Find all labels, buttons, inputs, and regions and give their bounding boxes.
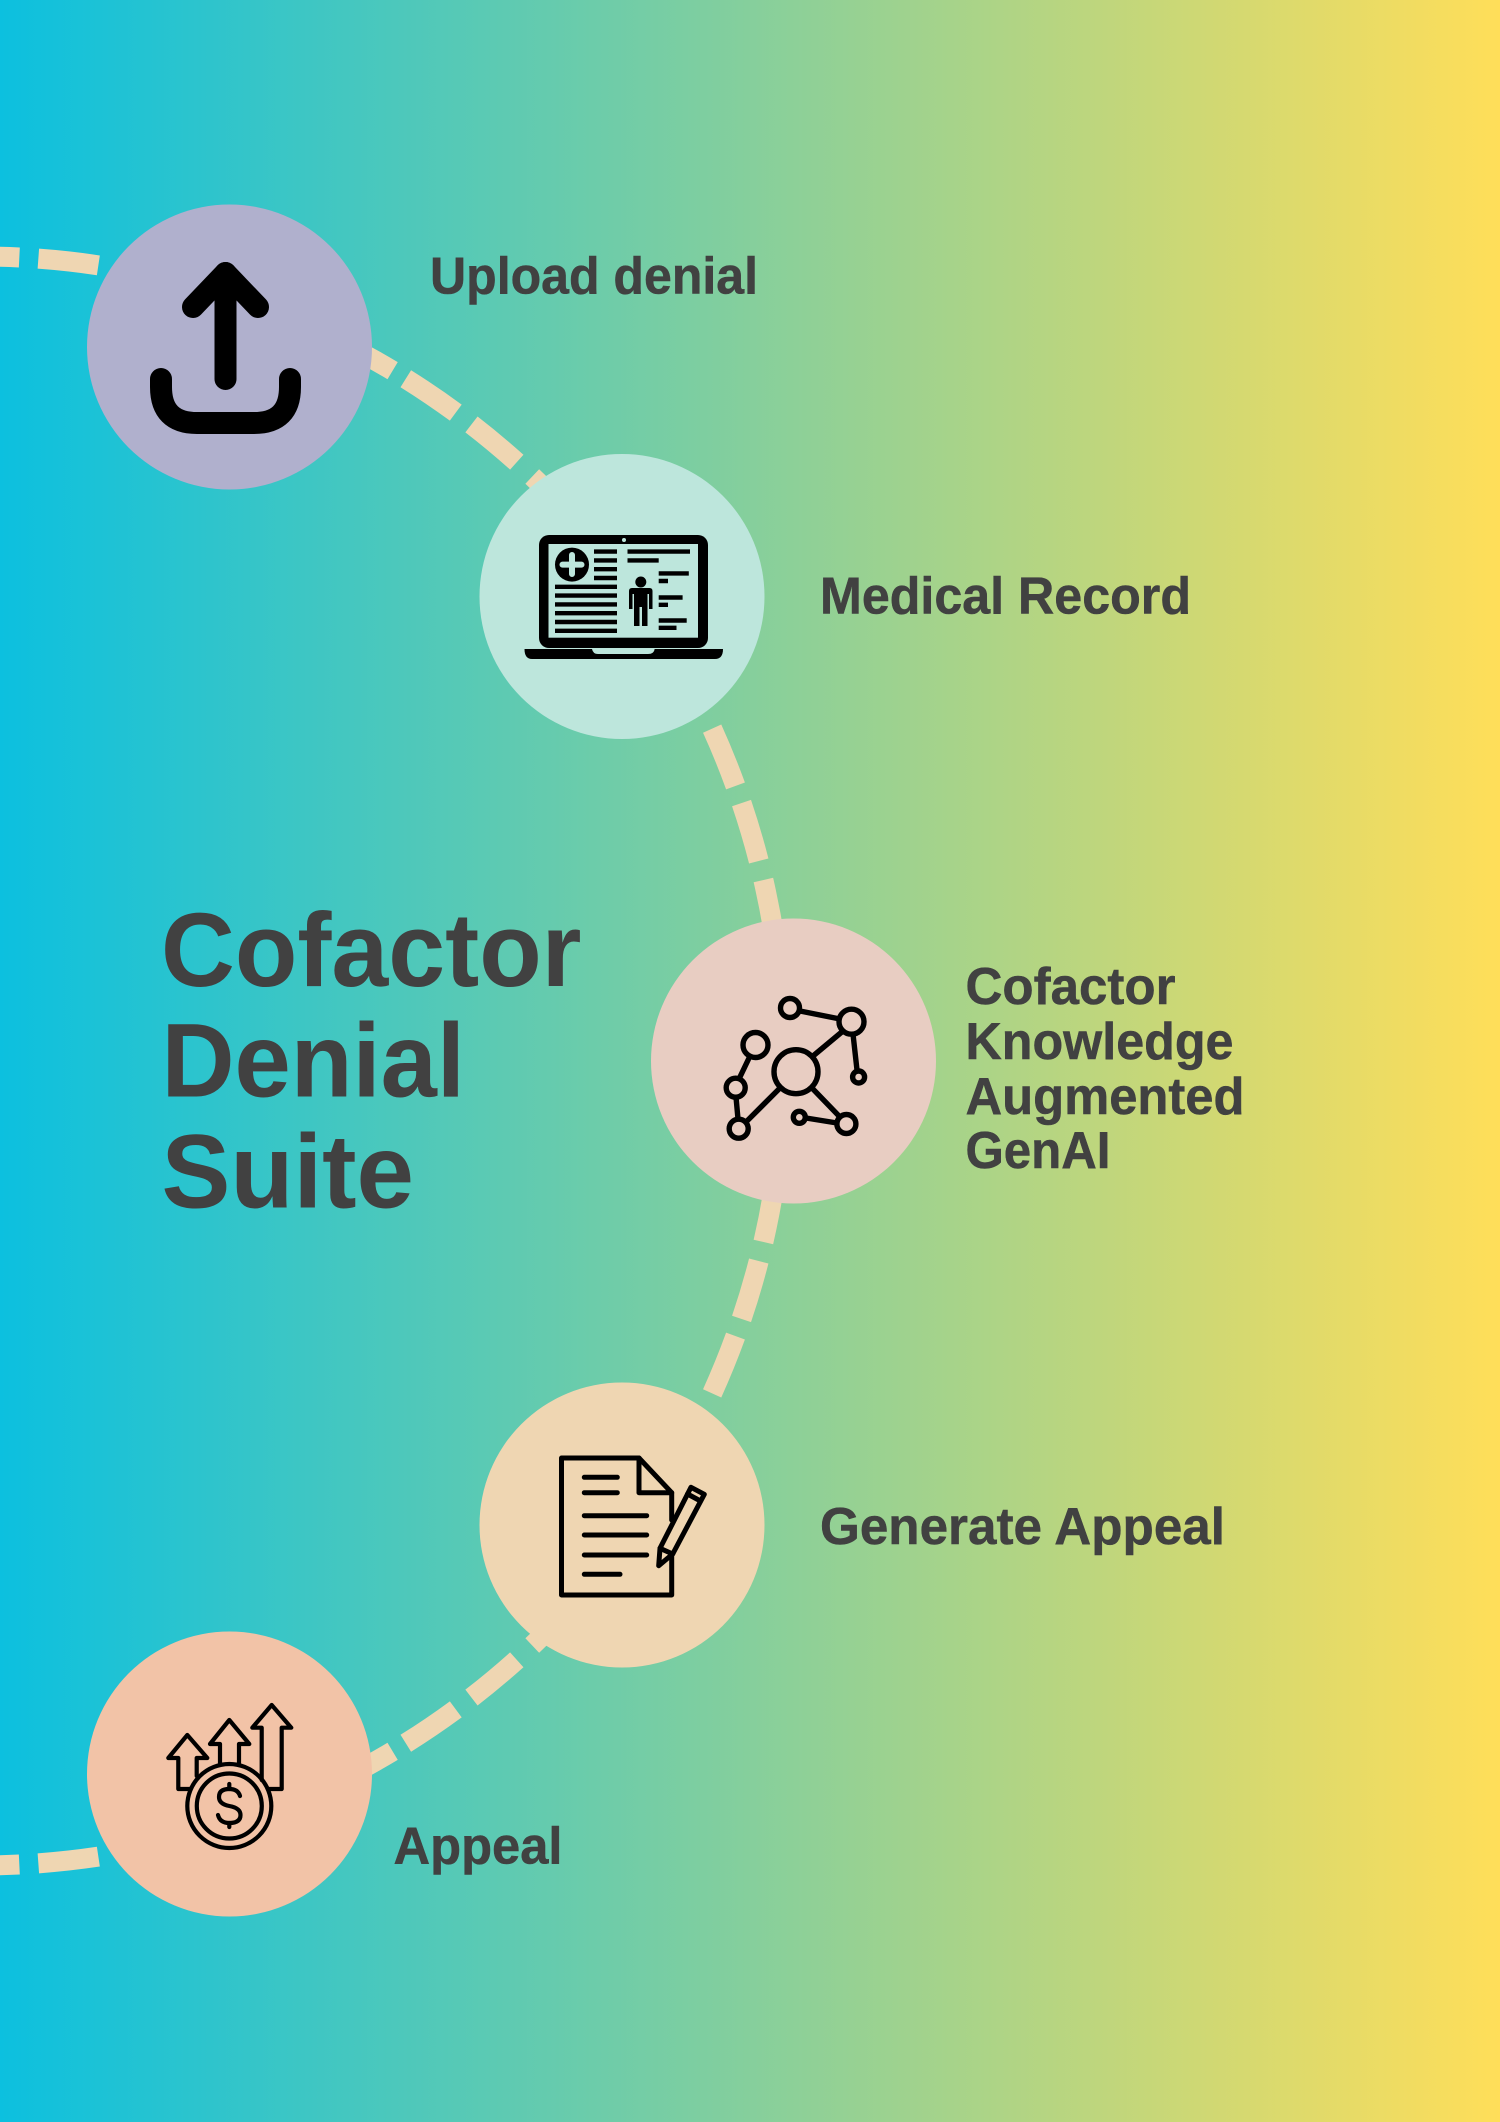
- step 5: appeal: [87, 1632, 562, 1916]
- step 4: generate appeal: [480, 1382, 1225, 1668]
- label: generate appeal: Generate Appeal: [820, 1498, 1225, 1556]
- label: medical record: Medical Record: [820, 568, 1191, 626]
- icon: laptop with patient record: [524, 535, 723, 659]
- label: cofactor knowledge augmented genai: [966, 958, 1244, 1180]
- circle: appeal: [87, 1632, 372, 1916]
- icon: rising arrows and coin: [168, 1705, 291, 1848]
- label: cofactor knowledge augmented genai: Knowledge: [966, 1013, 1234, 1071]
- title: Denial: [162, 1003, 465, 1120]
- icon: upload arrow: [161, 273, 290, 423]
- label: appeal: Appeal: [394, 1818, 562, 1876]
- title: Suite: [162, 1114, 414, 1230]
- label: upload denial: Upload denial: [430, 248, 758, 306]
- icon: document and pencil: [562, 1458, 704, 1595]
- step 3: knowledge augmented genai: [651, 918, 1244, 1204]
- step 1: upload denial: [87, 204, 758, 490]
- dashed arc connector: [0, 256, 784, 1866]
- circle: upload: [87, 204, 372, 490]
- label: cofactor knowledge augmented genai: Cofactor: [966, 958, 1176, 1016]
- step 2: medical record: [480, 454, 1191, 739]
- circle: medical record: [480, 454, 764, 739]
- label: cofactor knowledge augmented genai: Augmented: [966, 1068, 1244, 1126]
- title: Cofactor: [161, 892, 582, 1009]
- icon: knowledge graph: [726, 998, 865, 1138]
- label: cofactor knowledge augmented genai: GenAI: [966, 1122, 1110, 1180]
- circle: generate appeal: [480, 1382, 764, 1668]
- title: [161, 892, 582, 1230]
- circle: knowledge: [651, 918, 936, 1204]
